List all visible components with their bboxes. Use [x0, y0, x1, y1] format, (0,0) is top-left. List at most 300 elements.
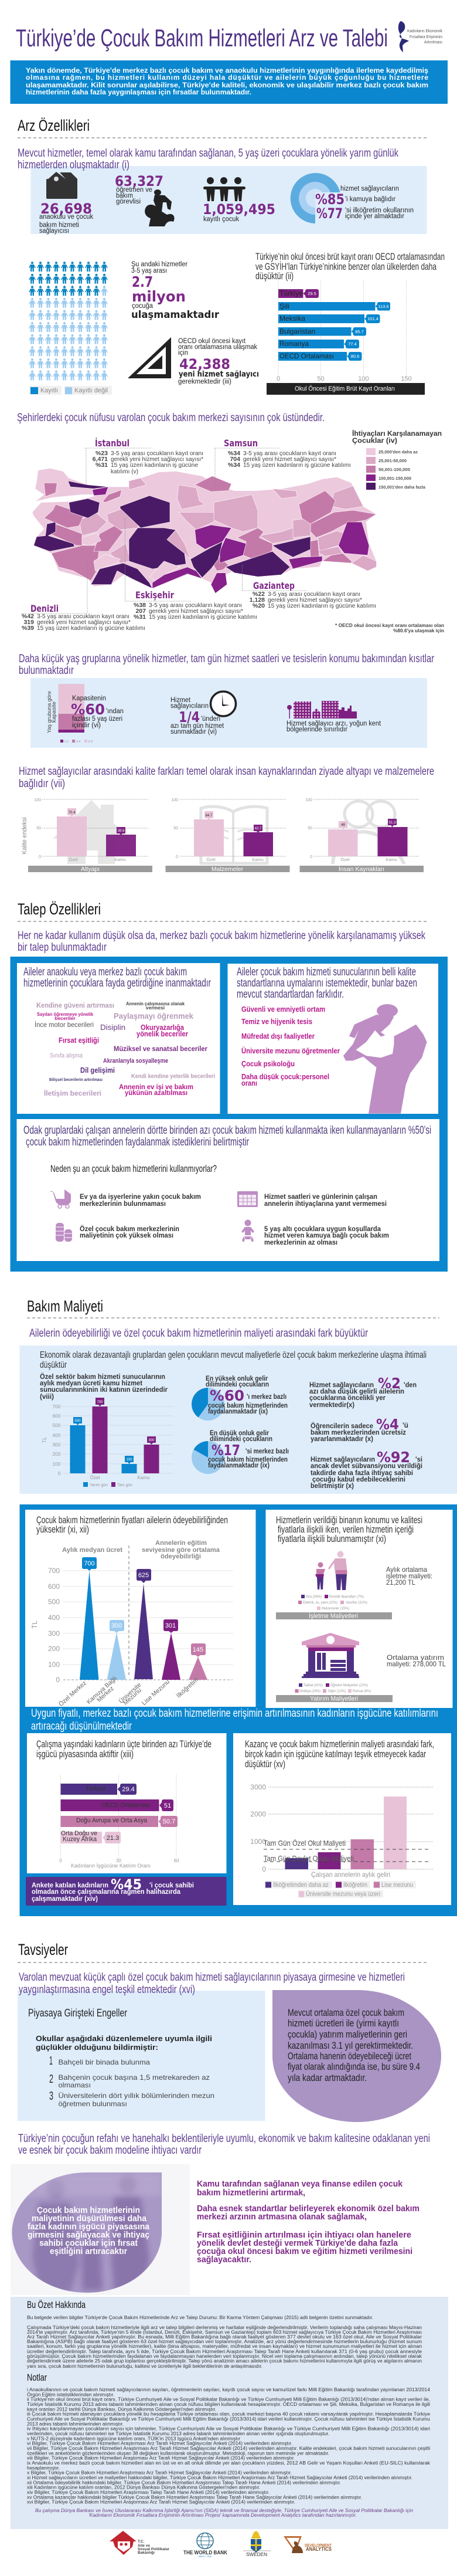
chart: fee and affordability spikes: ödeyebilirliği — [161, 1553, 201, 1560]
word cloud of benefits: Annenin çalışmasına olanak — [126, 1001, 185, 1006]
text block: recommendations: Fırsat eşitliğinin artırılması için ihtiyacı olan hanelere — [197, 2230, 411, 2240]
text: capacity share: Kapasitenin — [72, 695, 106, 702]
callout: Denizli: %42 — [22, 613, 34, 620]
callout: Denizli: 3-5 yaş arası çocukların kayıt oranı — [37, 613, 129, 620]
callout: payback period: Mevcut ortalama özel çocuk bakım — [288, 2007, 404, 2018]
chart caption bar: Okul Öncesi Eğitim Brüt Kayıt Oranları — [295, 385, 395, 392]
text block: about: 2014'te yapılmıştır. Arz tarafında, Türkiye'nin 5 ilinde (İstanbul, Denizli, Eskişehir, Samsun ve Gaziantep) toplam 603 hizmet sağlayıcıya Türkiye Çocuk Bakım Hizmetleri Araştırması — [27, 2330, 422, 2335]
panel: family photo callout: sahibi çocuklar için fırsat — [39, 2239, 138, 2248]
logo: Development Analytics — [284, 2536, 332, 2553]
statistic: teachers: bakım — [116, 192, 133, 199]
text: public provider shares: %85 — [315, 191, 345, 208]
statistic: teachers — [115, 173, 163, 205]
heading: Arz Özellikleri: Arz Özellikleri — [18, 117, 90, 134]
word cloud of benefits: Bilişsel becerilerin artırılması — [49, 1078, 103, 1082]
legend: investment costs: Diğer (12%) — [328, 1690, 346, 1693]
word cloud of benefits: yönelik beceriler — [137, 1029, 188, 1038]
callout: Istanbul: %23 — [96, 450, 108, 457]
legend: unmet need: 25,001-50,000 — [378, 458, 407, 463]
caption: operating costs: İşletme Maliyetleri — [309, 1612, 358, 1620]
footnote: map: %80.6'ya ulaşmak için — [393, 628, 444, 633]
list of requested standards — [241, 1005, 340, 1087]
panel: market entry barriers: Okullar aşağıdaki düzenlemelere uyumla ilgili — [36, 2034, 212, 2043]
legend: unmet need: 100,001-150,000 — [378, 476, 411, 481]
panel: female labour participation — [27, 1733, 226, 1873]
text: high private cost — [80, 1224, 179, 1239]
panel: family photo callout — [11, 2164, 190, 2295]
word cloud of benefits: İletişim becerileri — [44, 1089, 101, 1097]
panel: prices and participation — [20, 1504, 457, 1916]
chart: participation bars: 50.7 — [163, 1818, 175, 1825]
callout: Istanbul: 15 yaş üzeri kadınların iş gücüne — [111, 462, 198, 469]
text: highest decile 60 percent: %60 — [210, 1387, 244, 1404]
text: credits — [35, 2508, 414, 2518]
text: highest decile 60 percent: dilimindeki çocukların — [206, 1380, 269, 1388]
word cloud of benefits: Sınıfa alışma — [50, 1052, 83, 1059]
chart: gross enrollment bars: OECD Ortalaması — [279, 352, 334, 360]
text: capacity share: %60 — [71, 701, 105, 718]
callout: payback period — [272, 1990, 441, 2122]
statistic: 42,388 new providers: oranı ortalamasına ulaşmak — [178, 344, 257, 351]
chart: fee and affordability spikes: TL — [30, 1621, 39, 1629]
text: highest decile 60 percent: En yüksek onluk gelir — [206, 1374, 268, 1382]
text: full-day providers: sağlayıcıların — [170, 703, 209, 710]
legend: investment costs: Ruhsat (6%) — [353, 1690, 371, 1693]
heading: Talep Özellikleri: Talep Özellikleri — [18, 900, 101, 918]
statistic: 2 percent: çocuklarına öncelikli yer — [309, 1394, 386, 1402]
chart: quality index, human resources: Özel — [340, 857, 350, 862]
chart: quality index, materials: Özel — [206, 857, 216, 862]
callout: payback period: hizmeti ücretleri ile (yirmi kayıtlı — [288, 2018, 399, 2029]
statistic: 4 percent: yararlanmaktadır (x) — [311, 1435, 373, 1443]
callout: Samsun: 704 — [230, 456, 240, 463]
heading on blue: participation: artıracağı düşünülmektedir — [31, 1720, 132, 1733]
icon: mother and baby — [145, 189, 175, 226]
heading: notes: Notlar — [27, 2372, 47, 2383]
callout: Gaziantep: 15 yaş üzeri kadınların iş gücüne katılımı — [268, 602, 376, 609]
panel: reasons for non-use: çocuk bakım hizmetlerinden faydalanmak istediklerini belirtmiştir — [26, 1136, 249, 1148]
chart: gross enrollment bars: 85.7 — [355, 329, 364, 334]
callout: Eskisehir: 15 yaş üzeri kadınların iş gücüne katılımı — [149, 614, 257, 621]
callout: Eskisehir: %38 — [134, 602, 146, 609]
callout: Istanbul — [85, 438, 203, 485]
panel: family photo callout: Çocuk bakım hizmetlerinin — [37, 2206, 140, 2215]
statistic: 92 percent: 'si — [415, 1455, 422, 1463]
statistic: 2 percent: 'den — [404, 1381, 417, 1389]
text: average investment cost: maliyeti: 278,000 TL — [387, 1660, 446, 1668]
panel: female labour participation: Çalışma yaşındaki kadınların üçte birinden azı Türkiye’de — [36, 1738, 212, 1750]
legend: mother's education: Üniversite mezunu veya üzeri — [306, 1891, 380, 1898]
text block: notes — [27, 2387, 431, 2505]
chart: capacity by age group: 5-6 — [88, 740, 93, 744]
text block: recommendations: çocuğa okul öncesi bakım ve eğitim hizmeti verilmesini — [197, 2246, 412, 2256]
chart: participation bars: Kadınların İşgücüne Katılım Oranı — [71, 1863, 151, 1869]
text: median fee comparison: aylık medyan ücreti kamu hizmet — [40, 1379, 142, 1387]
callout: Denizli: 15 yaş üzeri kadınların iş gücüne katılımı — [37, 625, 145, 632]
text block: about: Çalışmada Türkiye'deki çocuk bakım hizmetleriyle ilgili arz ve talep bilgileri derlenmiş ve haritalar eşliğinde değerlendirilmiştir. Verilerin toplandığı saha çalışması Mayıs-Haziran — [27, 2325, 422, 2330]
text: median fee comparison: sunucularınınkinin iki katının üzerindedir — [40, 1385, 168, 1394]
legend: mother's education: Lise mezunu — [381, 1882, 413, 1889]
logo: ministry: Bakanlığı — [138, 2551, 155, 2555]
chart: participation bars: 21.3 — [107, 1835, 119, 1842]
text block: notes: xv Ortalama kazançlar hakkındaki bilgiler Türkiye Çocuk Bakım Hizmetleri Araştırması Talep Tarafı Hane Sağlayıcılar Anketi (2014) verilerinden alınmıştır. — [27, 2494, 362, 2500]
chart: monthly median fees: 200 — [52, 1451, 61, 1457]
subheading: younger age groups: bulunmaktadır — [19, 665, 74, 677]
legend: investment costs — [295, 1683, 371, 1693]
statistic: 42,388 new providers: yeni hizmet sağlayıcı — [179, 370, 259, 379]
legend: operating costs: Vasıflar (31%) — [346, 1601, 367, 1605]
chart: quality index, human resources: Kamu — [386, 857, 397, 862]
panel: family photo callout: maliyetinin düşürülmesi daha — [32, 2214, 147, 2224]
chart: fee and affordability spikes: seviyesine göre ortalama — [142, 1547, 220, 1554]
text block: notes: viii Bilgiler, Türkiye Çocuk Bakım Hizmetleri Araştırması Arz Tarafı Hizmet Sağlayıcılar Anketi (2014) verilerinden alınmıştır. — [27, 2456, 295, 2461]
text: credits: 'Kadınların Ekonomik Fırsatlara Erişiminin Artırılması Projesi' kapsamında Development Analytics tarafından hazırlanmıştır. — [88, 2513, 357, 2518]
text: median fee comparison — [40, 1372, 168, 1401]
chart: capacity by age group: 3-4 — [76, 740, 80, 744]
chart: monthly median fees: 100 — [52, 1461, 61, 1467]
callout: Gaziantep: %20 — [253, 602, 265, 609]
text block: notes: Örgün Eğitim istatistiklerinden alınmıştır. — [27, 2392, 114, 2397]
text block: notes: kayıt oranları 2012 tarihli Dünya Bankası, Dünya Kalkınma Göstergeleri'nden alınmıştır. — [27, 2406, 216, 2412]
callout: payback period: kazanılması 3.1 yıl gerektirmektedir. — [288, 2040, 413, 2051]
text: credits: Bu çalışma Dünya Bankası ve İsveç Uluslararası Kalkınma İşbirliği Ajansı'nın (SIDA) teknik ve finansal desteğiyle, Türkiye Cumhuriyeti Aile ve Sosyal Politikalar Bakanlığı için — [35, 2508, 414, 2513]
statistic: 2.7 million: Şu andaki hizmetler — [131, 261, 187, 268]
text: highest decile 60 percent: faydalanmaktadır (ix) — [208, 1407, 268, 1415]
logo: Development Analytics: DEVELOPMENT — [305, 2544, 332, 2548]
icon: set square — [128, 337, 171, 378]
chart: monthly income of working mothers: 0 — [262, 1865, 266, 1873]
text: lowest decile 17 percent: %17 — [212, 1442, 240, 1459]
chart: fee and affordability spikes: Mezunu — [122, 1687, 143, 1707]
text block: about: Arz Tarafı Hizmet Sağlayıcılar Anketi yapılmıştır. Bu esnada, Milli Eğitim Bakanlığına bağlı olarak faaliyet gösteren 377 devlet okulu ve 163 özel okul, Aile ve Sosyal Politikalar — [27, 2334, 422, 2340]
chart: gross enrollment bars: 80.6 — [351, 354, 359, 359]
panel heading — [40, 1350, 427, 1370]
legend: operating costs: Malzemeler (15%) — [322, 1607, 349, 1611]
panel: family photo callout: eşitliğini artıracaktır — [50, 2247, 127, 2256]
statistic: 2 percent: Hizmet sağlayıcıların — [309, 1381, 374, 1389]
chart: gross enrollment bars: 101.4 — [367, 316, 378, 321]
chart: participation bars: 0 — [59, 1858, 62, 1863]
legend: mother's education — [264, 1881, 416, 1898]
callout: 45 percent stopped working — [26, 1876, 226, 1906]
panel: price versus affordability: Çocuk bakım hizmetlerinin fiyatları ailelerin ödeyebilirliğinden — [36, 1514, 228, 1526]
chart: participation bars: 60 — [174, 1858, 179, 1863]
logo: World Bank — [183, 2533, 227, 2558]
subheading: unmet demand — [18, 930, 425, 954]
panel: intro: Yakın dönemde, Türkiye'de merkez bazlı çocuk bakım ve anaokulu hizmetlerinin yaygınlığında ilerleme kaydedilmiş — [26, 66, 428, 74]
callout: Samsun: 15 yaş üzeri kadınların iş gücüne katılımı — [243, 462, 351, 469]
chart: gross enrollment bars — [277, 280, 412, 382]
chart: monthly median fees — [42, 1398, 173, 1487]
subheading: current services — [18, 147, 398, 171]
chart: monthly income of working mothers: 3000 — [250, 1783, 266, 1791]
chart: quality index, infrastructure: 0 — [39, 855, 41, 859]
text block: notes: xvi Bilgiler, Türkiye Çocuk Bakım Hizmetleri Araştırması Arz Tarafı Hizmet Sağlayıcılar Anketi (2014) verilerinden alınmıştır. — [27, 2500, 295, 2505]
list of barriers — [49, 2055, 214, 2108]
chart: participation bars: 51 — [164, 1802, 171, 1809]
callout: 45 percent stopped working: çalışmamaktadır (xiv) — [32, 1894, 98, 1903]
project logo: Kadınların Ekonomik — [407, 29, 442, 33]
text block: about: Bakanlığına (ASPB) bağlı olarak faaliyet gösteren 63 özel hizmet sağlayıcıdan veri toplanmıştır. Analizde, arz yönü değerlendirmesinde hizmetlerin bulunurluğu (hizmet sunum — [27, 2339, 422, 2344]
callout: Eskisehir: gerekli yeni hizmet sağlayıcı sayısı* — [149, 608, 243, 615]
legend: enrolled — [29, 386, 112, 395]
heading: about: Bu Özet Hakkında — [27, 2299, 86, 2310]
text block: notes: iv İhtiyacı karşılanmayan çocukların sayısı için tahminler, Türkiye Cumhuriyeti Aile ve Sosyal Politikalar Bakanlığı ve Türkiye Cumhuriyeti Milli Eğitim Bakanlığı (2013/3014) idari — [27, 2426, 430, 2432]
word cloud of benefits: Kendi kendine yeterlik becerileri — [131, 1073, 215, 1080]
map of Turkey by province — [32, 468, 376, 594]
logo: Development Analytics: ANALYTICS — [306, 2546, 332, 2552]
text: hours not suitable — [264, 1192, 387, 1208]
chart: quality index, human resources: 50 — [308, 826, 312, 831]
chart: fee and affordability spikes: 300 — [48, 1629, 60, 1638]
chart: gross enrollment bars: Türkiye — [279, 289, 303, 297]
statistic: 42,388 new providers: 42,388 — [179, 356, 230, 372]
text: highest decile 60 percent — [206, 1374, 288, 1415]
callout: Samsun: %34 — [228, 450, 240, 457]
callout: Eskisehir: Eskişehir — [135, 589, 174, 601]
legend: mother's education: İlköğretim — [343, 1881, 367, 1889]
legend: unmet need: İhtiyaçları Karşılanamayan — [352, 429, 442, 438]
text: capacity share — [71, 695, 124, 729]
text block: recommendations — [197, 2179, 420, 2265]
statistic: 2.7 million: çocuğa — [132, 303, 154, 310]
heading: Tavsiyeler: Tavsiyeler — [18, 1941, 68, 1958]
subheading: younger age groups — [19, 653, 435, 677]
text block: notes: ix Anaokulu ve merkez bazlı çocuk bakım hizmetleri alan en üst ve en alt onluk dilimde yer alan çocukların yüzdesi, 2012 AB Gelir ve Yaşam Koşulları Anketi (EU-SILC) kullanılarak — [27, 2460, 431, 2466]
icon: house with clock — [46, 172, 77, 199]
legend: mother's education: İlköğretimden daha az — [273, 1881, 329, 1889]
chart: fee and affordability spikes: Kamuya Bağlı — [86, 1675, 118, 1706]
chart caption bar — [267, 383, 425, 395]
statistic: teachers: görevlisi — [116, 198, 141, 205]
chart: fee and affordability spikes: Lise Mezunu — [141, 1678, 171, 1707]
statistic: 2 percent — [309, 1375, 417, 1409]
text: lowest decile 17 percent: faydalanmaktadır (ix) — [208, 1461, 270, 1469]
statistic: 42,388 new providers — [178, 338, 259, 385]
chart: monthly income of working mothers — [250, 1783, 433, 1879]
panel: perceived benefits — [17, 963, 220, 1114]
chart: quality index, materials — [165, 798, 289, 873]
list of barriers: 3 — [49, 2090, 53, 2103]
chart: fee and affordability spikes: 700 — [84, 1560, 95, 1567]
chart: quality index, human resources: 0 — [310, 855, 312, 859]
chart: gross enrollment bars: 29.5 — [308, 291, 316, 296]
text: median fee comparison: (viii) — [40, 1392, 54, 1401]
text block: about: saatleri, konum, farklı yaş gruplarına yönelik hizmetler), kalite (bina altyapısı, materyaller, müfredat ve insan kaynakları) ve hizmet sunumunun maliyetleri ile hizmet için alınan — [27, 2344, 422, 2349]
text block: about: yanı sıra, çocuk bakım hizmetlerinin bulunurluğu, kalitesi ve ücretleriyle ilgili beklentilerinin de anlaşılmasıdır. — [27, 2364, 262, 2369]
statistic: 92 percent — [311, 1449, 422, 1490]
callout: Eskisehir — [125, 518, 257, 621]
list of requested standards: Çocuk psikoloğu — [241, 1059, 295, 1068]
panel: market entry barriers: Piyasaya Girişteki Engeller — [28, 2007, 127, 2019]
footnote: map — [335, 623, 444, 633]
callout: Gaziantep: %22 — [253, 591, 265, 598]
chart: monthly median fees: 400 — [52, 1432, 61, 1438]
statistic: teachers: öğretmen ve — [116, 187, 152, 194]
panel: capacity constraints — [30, 678, 427, 748]
statistic: 92 percent: çocuğu kabul edebileceklerini — [312, 1475, 405, 1483]
statistic: 2 percent: %2 — [378, 1375, 401, 1392]
callout: Samsun: 3-5 yaş arası çocukların kayıt oranı — [243, 450, 336, 457]
statistic: providers: bakım hizmeti — [39, 222, 79, 229]
subheading: unmet demand: bir talep bulunmaktadır — [18, 941, 107, 954]
text block: notes: xiv Bilgiler, Türkiye Çocuk Bakım Hizmetleri Araştırması Talep Tarafı Hane Anketi (2014) verilerinden alınmıştır. — [27, 2490, 270, 2495]
callout: 45 percent stopped working: 'i çocuk sahibi — [149, 1881, 194, 1889]
callout: payback period: yıla kadar artmaktadır. — [288, 2072, 367, 2083]
panel: earnings versus cost — [233, 1733, 451, 1905]
chart: quality index, materials: Kamu — [252, 857, 264, 862]
chart: fee and affordability spikes: 500 — [48, 1598, 60, 1606]
panel: quality standards — [227, 964, 438, 1114]
text block: about: Bu belgede verilen bilgiler Türkiye'de Çocuk Bakım Hizmetlerinde Arz ve Talep Durumu: Bir Karma Yöntem Çalışması (2015) adlı belgenin özetini sunmaktadır. — [27, 2315, 373, 2320]
text block: notes: verilerinden, çocuk nüfusu tahminleri ise Türkiye İstatistik Kurumu 2013 adres tabanlı tahminlerinden alınan veriler ışığında oluşturulmuştur. — [27, 2431, 329, 2436]
panel: reasons for non-use: Neden şu an çocuk bakım hizmetlerini kullanmıyorlar? — [50, 1163, 217, 1174]
panel: price versus affordability — [25, 1510, 255, 1708]
caption: investment costs: Yatırım Maliyetleri — [310, 1695, 358, 1702]
text block: notes: hesaplanmıştır. — [27, 2465, 60, 2470]
panel: family photo callout: girmesini sağlayacak ve ihtiyaç — [28, 2231, 149, 2240]
chart: fee and affordability spikes: 200 — [48, 1645, 60, 1653]
icon: baby — [241, 1220, 254, 1242]
logo: World Bank: IBRD • IDA — [199, 2555, 212, 2558]
subheading: current services: hizmetlerden oluşmaktadır (i) — [18, 159, 129, 171]
list of requested standards: Daha düşük çocuk:personel — [241, 1072, 329, 1081]
panel: intro: olmasına rağmen, bu hizmetleri kullanım düzeyi hala düşüktür ve ailelerin büyük çoğunluğu bu hizmetlere — [26, 73, 428, 82]
panel: reasons for non-use — [16, 1119, 439, 1261]
chart: fee and affordability spikes: Annelerin eğitim — [155, 1540, 207, 1547]
chart: fee and affordability spikes: Merkez — [96, 1685, 115, 1704]
statistic: 92 percent: %92 — [377, 1449, 410, 1466]
chart: quality index, infrastructure: Altyapı — [81, 866, 100, 873]
text: monthly operating cost: Aylık ortalama — [386, 1565, 427, 1574]
chart: quality index, infrastructure: 38.6 — [118, 829, 125, 833]
legend: enrolled: Kayıtlı — [40, 387, 58, 394]
text: capacity share: 'ından — [106, 708, 124, 715]
list of requested standards: Temiz ve hijyenik tesis — [241, 1017, 312, 1026]
panel: demand — [11, 957, 448, 1272]
text: full-day providers: 1/4 — [179, 709, 200, 726]
word cloud of benefits: Fırsat eşitliği — [59, 1036, 99, 1045]
panel: intro: ulaşamamaktadır. Kilit sorunlar aşılabilirse, Türkiye'de kaliteli, ekonomik ve ulaşılabilir merkez bazlı çocuk bakım — [26, 81, 428, 89]
statistic: enrolled children: 1,059,495 — [203, 201, 275, 218]
chart: quality index, materials: Malzemeler — [212, 866, 244, 873]
word cloud of benefits: Disiplin — [100, 1023, 125, 1032]
text: average investment cost — [387, 1653, 446, 1668]
statistic: 4 percent: bakım merkezlerinden ücretsiz — [311, 1428, 406, 1436]
chart: gross enrollment bars: Romanya — [279, 340, 309, 348]
statistic: providers: anaokulu ve çocuk — [39, 213, 93, 221]
chart: fee and affordability spikes: 625 — [138, 1572, 149, 1579]
legend: operating costs: Kira (34%) — [306, 1595, 322, 1599]
text: public provider shares: 'i kamuya bağlıdır — [345, 196, 395, 203]
text block: recommendations: Kamu tarafından sağlanan veya finanse edilen çocuk — [197, 2179, 403, 2189]
list of barriers: 2 — [49, 2073, 53, 2086]
subheading: cities: Şehirlerdeki çocuk nüfusu varolan çocuk bakım merkezi sayısının çok üstündedir. — [17, 412, 325, 424]
chart: fee and affordability spikes: İlköğretim — [175, 1676, 200, 1699]
chart: monthly median fees: 700 — [52, 1404, 61, 1409]
panel: perceived benefits: Aileler anaokulu veya merkez bazlı çocuk bakım — [23, 966, 187, 978]
text: average investment cost: Ortalama yatırım — [387, 1653, 444, 1662]
chart: fee and affordability spikes: 301 — [165, 1622, 176, 1629]
callout: Denizli: %39 — [22, 625, 34, 632]
list of requested standards: oranı — [241, 1079, 257, 1087]
subheading: legislation — [19, 1971, 405, 1996]
list of barriers: olmaması — [59, 2081, 91, 2089]
heading: enrollment comparison: düşüktür (ii) — [255, 270, 294, 282]
chart: fee and affordability spikes: 100 — [48, 1660, 60, 1669]
word cloud of benefits: Dil gelişimi — [80, 1066, 115, 1075]
text block: notes: Cumhuriyeti Aile ve Sosyal Politikalar Bakanlığı ve Türkiye Cumhuriyeti Milli Eğitim Bakanlığı (2013/3014) idari verileri kullanılmıştır. Çocuk nüfusu tahminleri ise Türkiye İstatistik Kurumu — [27, 2416, 430, 2422]
text: monthly operating cost: işletme maliyeti: — [386, 1572, 432, 1580]
callout: Gaziantep: gerekli yeni hizmet sağlayıcı sayısı* — [268, 596, 362, 604]
chart: quality index, infrastructure: 100 — [34, 798, 41, 802]
word cloud of benefits: Akranlarıyla sosyalleşme — [103, 1057, 168, 1065]
chart: monthly median fees: Tam gün — [117, 1483, 132, 1487]
word cloud of benefits: Paylaşmayı öğrenmek — [114, 1011, 193, 1021]
statistic: 4 percent — [311, 1416, 408, 1443]
callout: 45 percent stopped working: %45 — [111, 1876, 142, 1893]
text: full-day providers: 'ünden — [201, 716, 220, 723]
panel: operating and investment costs: fiyatlarla ilişkili bulunmamıştır (xi) — [278, 1533, 386, 1544]
chart: gross enrollment bars: 113.6 — [378, 304, 389, 309]
chart: quality index, materials: 0 — [176, 855, 178, 859]
chart: fee and affordability spikes: Aylık medyan ücret — [62, 1547, 122, 1554]
chart: monthly median fees: 300 — [52, 1442, 61, 1448]
panel: operating and investment costs — [266, 1510, 452, 1708]
text: no nearby centres — [80, 1192, 201, 1208]
icon: parent lifting child — [343, 1004, 427, 1114]
icon: city skyline — [287, 701, 357, 718]
chart: fee and affordability spikes: 700 — [48, 1567, 60, 1575]
text: urban supply: Hizmet sağlayıcı arzı, yoğun kent — [287, 720, 381, 727]
chart: participation bars — [59, 1774, 179, 1869]
word cloud of benefits: beceriler — [54, 1015, 76, 1021]
statistic: 2.7 million — [131, 261, 220, 321]
text: median fee comparison: Özel sektör bakım hizmeti sunucularının — [40, 1372, 165, 1381]
text block: notes: vii Bilgiler, Türkiye Çocuk Bakım Hizmetleri Araştırması Arz Tarafı Hizmet Sağlayıcılar Anketi (2014) verilerinden alınmıştır. Kalite endeksleri, çocuk bakım hizmeti sunucularının çeşitli — [27, 2446, 430, 2451]
chart: monthly income of working mothers: Tam Gün Devlet Okulu Maliyeti — [264, 1854, 354, 1863]
text: public provider shares: içinde yer almaktadır — [345, 213, 404, 220]
footnote: map: * OECD okul öncesi kayıt oranı ortalaması olan — [335, 623, 444, 628]
text block: notes: i Anaokullarının ve çocuk bakım hizmeti sağlayıcılarının sayıları, öğretmenlerin sayıları, kayıtlı çocuk sayısı ve kamu/özel farkı Milli Eğitim Bakanlığı tarafından yayınlanan 2013/2014 — [27, 2387, 431, 2392]
subheading: legislation: yaygınlaştırmasına engel teşkil etmektedir (xvi) — [19, 1984, 195, 1996]
word cloud of benefits: Müziksel ve sanatsal beceriler — [114, 1045, 207, 1053]
legend: enrolled: Kayıtlı değil — [74, 387, 108, 394]
chart: fee and affordability spikes: 600 — [48, 1582, 60, 1591]
text: few public centres for under-fives: merkezlerinin az olması — [264, 1238, 337, 1246]
text block: about — [27, 2315, 422, 2369]
chart: gross enrollment bars: 0 — [277, 375, 280, 382]
list of barriers: Bahçenin çocuk başına 1,5 metrekareden az — [59, 2073, 210, 2082]
chart: monthly median fees: Kamu — [138, 1475, 149, 1480]
callout: Eskisehir: 3-5 yaş arası çocukların kayıt oranı — [149, 602, 242, 609]
chart: quality index, infrastructure: Özel — [69, 857, 78, 862]
chart: gross enrollment bars: Meksika — [279, 314, 305, 323]
text block: recommendations: bakım hizmetlerini artırmak, — [197, 2188, 305, 2198]
callout: Samsun: Samsun — [224, 438, 258, 449]
chart: participation bars: Kuzey Afrika — [63, 1836, 97, 1843]
text: capacity share: içindir (vi) — [72, 722, 101, 729]
logo: World Bank: THE WORLD BANK — [183, 2550, 227, 2555]
subheading: quality differences — [19, 765, 434, 790]
chart: quality index, infrastructure: 50 — [36, 826, 41, 831]
caption: investment costs — [276, 1695, 393, 1702]
text block: recommendations: sağlayacaktır. — [197, 2255, 251, 2265]
logo: ministry: Aile ve — [138, 2544, 150, 2548]
legend: operating costs: Temizlik Masrafları (7%) — [329, 1595, 364, 1599]
statistic: 2.7 million: 3-5 yaş arası — [131, 267, 167, 274]
list of barriers: öğretmen bulunması — [59, 2100, 127, 2108]
